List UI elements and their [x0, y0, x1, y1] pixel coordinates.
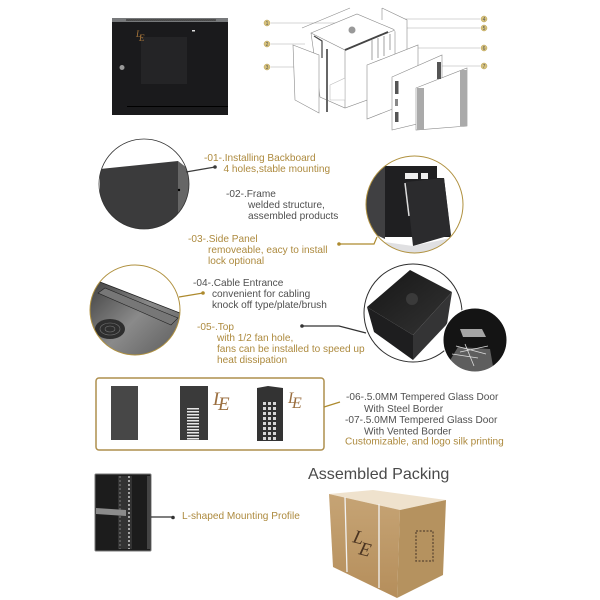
text: 06 and 07 door options: -07-.5.0MM Tempered Glass Door [345, 415, 498, 426]
text: L-shaped mounting profile: L-shaped Mounting Profile [182, 511, 300, 522]
text: 02 frame [226, 189, 338, 222]
text: 02 frame: assembled products [248, 211, 338, 222]
photo: cardboard box: L [350, 526, 366, 549]
text: 06 and 07 door options: -06-.5.0MM Tempered Glass Door [346, 392, 499, 403]
exploded diagram with numbered callouts: 5 [483, 26, 486, 32]
photo: L-shaped mounting profile [95, 474, 151, 551]
exploded diagram with numbered callouts: 3 [266, 65, 269, 71]
heading: assembled packing: Assembled Packing [308, 465, 449, 483]
number badges [264, 16, 487, 70]
connector dot: mounting profile [171, 516, 175, 519]
connector dot: backboard [213, 165, 217, 169]
text: 05 top [197, 322, 365, 366]
text: 03 side panel: removeable, eacy to install [208, 245, 328, 256]
product photo: wall cabinet front: E [138, 33, 145, 43]
detail circle: cabinet interior [443, 308, 507, 372]
logo: LE [287, 390, 302, 412]
callout lines [271, 19, 480, 67]
photo: cardboard box [329, 490, 446, 598]
detail circle: cabinet top view [364, 264, 462, 362]
connector: mounting profile [151, 516, 173, 518]
logo: LE [212, 389, 230, 415]
exploded diagram with numbered callouts: 7 [483, 64, 486, 70]
text: 06 and 07 door options: Customizable, and logo silk printing [345, 436, 504, 448]
connector: side panel [339, 237, 377, 244]
text: 03 side panel [188, 234, 328, 267]
connector: backboard [186, 167, 215, 172]
text: 04 cable entrance: convenient for cabling [212, 289, 310, 300]
logo: LE: L [287, 390, 297, 407]
logo: LE: L [212, 389, 224, 410]
text: 06 and 07 door options: With Vented Border [364, 426, 452, 438]
cabinet body drawing [293, 8, 467, 130]
exploded diagram with numbered callouts: 6 [483, 46, 486, 52]
product photo: wall cabinet front [112, 18, 228, 115]
text: 04 cable entrance: -04-.Cable Entrance [193, 278, 284, 289]
fan hole [348, 26, 356, 34]
connector dot: top [300, 324, 304, 328]
panel: glass door options [96, 378, 324, 450]
door: steel border [180, 386, 208, 440]
connector: glass doors [324, 402, 340, 407]
text: 04 cable entrance: knock off type/plate/brush [212, 300, 327, 311]
exploded diagram with numbered callouts: 4 [483, 17, 486, 23]
text: 03 side panel: -03-.Side Panel [188, 234, 258, 245]
logo: LE: E [291, 395, 302, 412]
door vents [395, 62, 467, 130]
logo: LE: E [217, 394, 230, 415]
door: solid [111, 386, 138, 440]
photo: cardboard box: E [356, 538, 374, 562]
text: 02 frame: welded structure, [247, 200, 325, 211]
text: 01 installing backboard [204, 153, 330, 175]
connector dot: side panel [337, 242, 341, 246]
connector: cable entrance [179, 293, 203, 297]
text: 05 top: -05-.Top [197, 322, 234, 333]
detail circle: side panel [366, 156, 463, 256]
exploded diagram with numbered callouts [264, 8, 487, 130]
text: 01 installing backboard: -01-.Installing Backboard [204, 153, 316, 164]
door: vented [257, 386, 283, 441]
text: 05 top: with 1/2 fan hole, [216, 333, 293, 344]
exploded diagram with numbered callouts: 2 [266, 42, 269, 48]
detail circle: backboard [99, 139, 191, 230]
product photo: wall cabinet front: L [135, 29, 141, 39]
text: 05 top: fans can be installed to speed up [217, 344, 365, 355]
text: 04 cable entrance [193, 278, 327, 311]
text: 05 top: heat dissipation [217, 355, 287, 366]
connector: top [302, 326, 366, 333]
text: 01 installing backboard: 4 holes,stable mounting [224, 164, 330, 175]
exploded diagram with numbered callouts: 1 [266, 21, 269, 27]
detail circle: cable entrance [90, 265, 185, 355]
text: 06 and 07 door options [345, 392, 504, 448]
text: 06 and 07 door options: With Steel Border [364, 404, 444, 415]
text: 03 side panel: lock optional [208, 256, 264, 267]
text: 02 frame: -02-.Frame [226, 189, 276, 200]
connector dot: cable entrance [201, 291, 205, 295]
